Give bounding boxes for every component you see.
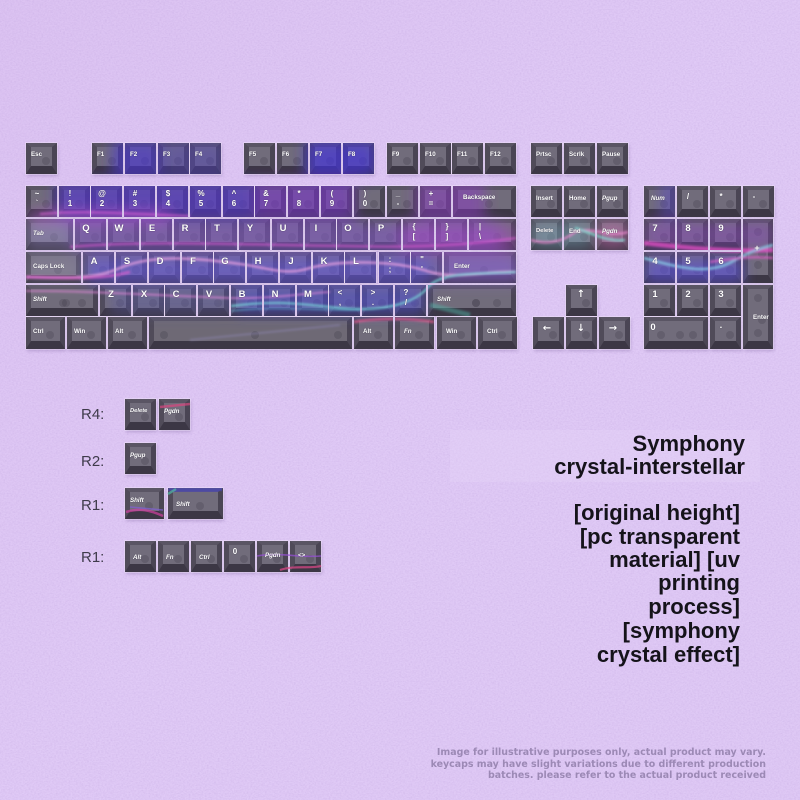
keycap Pgdn: [159, 399, 190, 430]
wave lines: [26, 212, 773, 340]
qwerty row: E: [149, 223, 155, 234]
extra keycaps: R4 row: [81, 398, 192, 434]
function key row: F9: [392, 151, 399, 158]
number row: -: [397, 199, 399, 208]
text block: product specification: printing: [658, 570, 740, 595]
home row: S: [124, 256, 130, 267]
home row: ': [421, 265, 423, 274]
home row: A: [91, 256, 97, 267]
navigation cluster: →: [609, 323, 617, 334]
numeric keypad: 6: [718, 256, 724, 267]
numeric keypad: [644, 186, 776, 352]
home row: D: [157, 256, 163, 267]
function key row: F12: [490, 151, 501, 158]
keycap Shift long: [168, 488, 223, 519]
label R1: R1:: [81, 549, 104, 566]
home row: K: [321, 256, 327, 267]
text block: product specification: process]: [648, 594, 740, 619]
home row: G: [221, 256, 229, 267]
function key row: F6: [282, 151, 289, 158]
home row: Enter: [454, 263, 470, 270]
extra keycaps: R2 row: [81, 442, 158, 478]
qwerty row: [26, 218, 518, 253]
numeric keypad: -: [753, 192, 755, 201]
text block: product specification: [574, 500, 740, 667]
shift row: C: [173, 289, 179, 300]
numeric keypad: /: [687, 192, 689, 201]
disclaimer note: Image for illustrative purposes only, actual product may vary.: [437, 747, 766, 758]
keycap Pgup: [125, 443, 156, 474]
bottom modifier row with spacebar: Ctrl: [33, 328, 44, 335]
navigation cluster: Insert: [536, 195, 553, 202]
navigation cluster: ↓: [577, 323, 585, 334]
keycap Delete: Delete: [130, 408, 147, 414]
numeric keypad: 9: [718, 223, 724, 234]
crystal colour overlay on keycaps: [26, 143, 773, 342]
number row: 4: [166, 199, 170, 208]
numeric keypad: +: [754, 243, 760, 254]
navigation cluster: End: [569, 228, 581, 235]
function key row: F1: [97, 151, 104, 158]
number row: *: [297, 189, 301, 198]
home row: L: [353, 256, 359, 267]
numeric keypad: 1: [652, 289, 658, 300]
home row: Caps Lock: [33, 263, 64, 270]
heading: product name: [554, 431, 745, 479]
shift row: B: [239, 289, 245, 300]
qwerty row: I: [315, 223, 317, 234]
label R4: R4:: [81, 406, 104, 423]
extra keycaps: R1 modifier row: Alt: [133, 554, 141, 561]
qwerty row: T: [214, 223, 220, 234]
number row: 7: [264, 199, 268, 208]
number row: 3: [133, 199, 137, 208]
extra keycaps: R1 modifier row: Ctrl: [199, 554, 210, 561]
qwerty row: }: [445, 222, 449, 231]
number row: 9: [330, 199, 334, 208]
function key row: [26, 142, 518, 178]
shift row: X: [141, 289, 147, 300]
qwerty row: ]: [446, 232, 448, 241]
text block: product specification: [original height]: [574, 500, 740, 525]
numeric keypad: *: [719, 192, 723, 201]
keycap Shift short: [125, 488, 164, 519]
numeric keypad: 5: [685, 256, 691, 267]
main keyboard block: [26, 186, 520, 352]
shift row: Shift: [437, 296, 451, 303]
number row: @: [98, 189, 106, 198]
number row: Backspace: [463, 194, 495, 201]
number row: `: [36, 199, 38, 208]
numeric keypad: .: [720, 320, 722, 331]
function key row: F7: [315, 151, 322, 158]
function key row: F2: [130, 151, 137, 158]
number row: %: [197, 189, 205, 198]
number row: 2: [100, 199, 104, 208]
disclaimer note: [431, 747, 766, 781]
heading: product name: crystal-interstellar: [554, 454, 745, 479]
navigation cluster: [530, 142, 632, 352]
number row: (: [331, 189, 333, 198]
function key row: Esc: [31, 151, 42, 158]
heading: product name: Symphony: [633, 431, 745, 456]
extra keycaps: R1 modifier row: <>: [298, 552, 305, 559]
qwerty row: R: [182, 223, 188, 234]
shift row: Z: [108, 289, 114, 300]
number row: 6: [232, 199, 236, 208]
home row: H: [255, 256, 261, 267]
bottom modifier row with spacebar: Win: [446, 328, 457, 335]
keycap Pgdn: Pgdn: [164, 408, 179, 415]
function key row: F10: [425, 151, 436, 158]
navigation cluster: Delete: [536, 228, 553, 234]
shift row: /: [405, 298, 407, 307]
shift row: Shift: [33, 296, 47, 303]
qwerty row: U: [280, 223, 286, 234]
numeric keypad: 8: [685, 223, 691, 234]
numeric keypad: 4: [652, 256, 658, 267]
number row: 8: [297, 199, 301, 208]
shift row: [26, 284, 518, 319]
qwerty row: |: [479, 222, 481, 231]
shift row: ,: [339, 298, 341, 307]
bottom modifier row with spacebar: Win: [74, 328, 85, 335]
function key row: F4: [195, 151, 202, 158]
navigation cluster: Scrlk: [569, 151, 584, 158]
qwerty row: Y: [247, 223, 253, 234]
bottom modifier row with spacebar: Alt: [115, 328, 123, 335]
extra keycaps: R1 modifier row: Pgdn: [265, 552, 280, 559]
extra keycaps: R1 modifier row: [81, 540, 324, 576]
navigation cluster: Pgup: [602, 195, 617, 202]
label R1: R1:: [81, 497, 104, 514]
numeric keypad: 3: [718, 289, 724, 300]
keycap Shift short: Shift: [130, 497, 144, 504]
number row: !: [69, 189, 71, 198]
shift row: M: [304, 289, 312, 300]
shift row: V: [206, 289, 212, 300]
number row: =: [429, 199, 433, 208]
shift row: <: [338, 288, 342, 297]
function key row: F5: [249, 151, 256, 158]
number row: +: [429, 189, 433, 198]
number row: ~: [35, 189, 39, 198]
number row: 0: [363, 199, 367, 208]
extra keycaps: R1 shift row: [81, 488, 226, 522]
function key row: F11: [457, 151, 467, 158]
numeric keypad: 2: [685, 289, 691, 300]
navigation cluster: Pgdn: [602, 228, 617, 235]
numeric keypad: Num: [651, 195, 665, 202]
home row: ": [420, 255, 424, 264]
arrow keys: [566, 285, 597, 316]
number row: _: [396, 189, 400, 198]
colour clouds: [26, 140, 774, 314]
bottom modifier row with spacebar: Fn: [404, 328, 412, 335]
navigation cluster: Home: [569, 195, 586, 202]
extra keycaps: R1 modifier row: Fn: [166, 554, 174, 561]
number row: 5: [199, 199, 203, 208]
qwerty row: [: [413, 232, 415, 241]
number row: $: [166, 189, 170, 198]
bottom modifier row with spacebar: Alt: [363, 328, 371, 335]
shift row: >: [371, 288, 375, 297]
home row: ;: [389, 265, 391, 274]
shift row: ?: [404, 288, 408, 297]
shift row: N: [272, 289, 278, 300]
qwerty row: W: [115, 223, 123, 234]
disclaimer note: keycaps may have slight variations due to different production: [431, 759, 766, 770]
extra keycaps: R1 modifier row: 0: [233, 547, 237, 556]
text block: product specification: [pc transparent: [580, 524, 740, 549]
keycap Pgup: Pgup: [130, 452, 145, 459]
keycap Shift long: Shift: [176, 501, 190, 508]
numeric keypad: Enter: [753, 314, 769, 321]
number row: ^: [232, 189, 236, 198]
number row: 1: [68, 199, 72, 208]
function key row: F3: [163, 151, 170, 158]
navigation cluster: Pause: [602, 151, 620, 158]
home row: J: [288, 256, 294, 267]
navigation cluster: ←: [543, 323, 551, 334]
number row: [26, 186, 518, 220]
shift row: .: [372, 298, 374, 307]
number row: ): [364, 189, 366, 198]
label R2: R2:: [81, 453, 104, 470]
home row: F: [190, 256, 196, 267]
navigation cluster: Prtsc: [536, 151, 551, 158]
home row: :: [389, 255, 391, 264]
qwerty row: Q: [82, 223, 90, 234]
function key row: F8: [348, 151, 355, 158]
numeric keypad: 7: [652, 223, 658, 234]
disclaimer note: batches. please refer to the actual product received: [488, 770, 766, 781]
number row: #: [133, 189, 137, 198]
home row: [26, 251, 518, 286]
qwerty row: P: [378, 223, 384, 234]
arrow keys: ↑: [577, 289, 585, 300]
numeric keypad: 0: [650, 322, 656, 333]
text block: product specification: [symphony: [623, 618, 740, 643]
qwerty row: {: [412, 222, 416, 231]
number row: &: [263, 189, 269, 198]
bottom modifier row with spacebar: Ctrl: [487, 328, 498, 335]
bottom modifier row with spacebar: [26, 316, 520, 352]
qwerty row: Tab: [33, 230, 44, 237]
keycap Delete: [125, 399, 156, 430]
qwerty row: O: [344, 223, 352, 234]
text block: product specification: crystal effect]: [597, 642, 740, 667]
qwerty row: \: [479, 232, 481, 241]
text block: product specification: material] [uv: [609, 547, 740, 572]
